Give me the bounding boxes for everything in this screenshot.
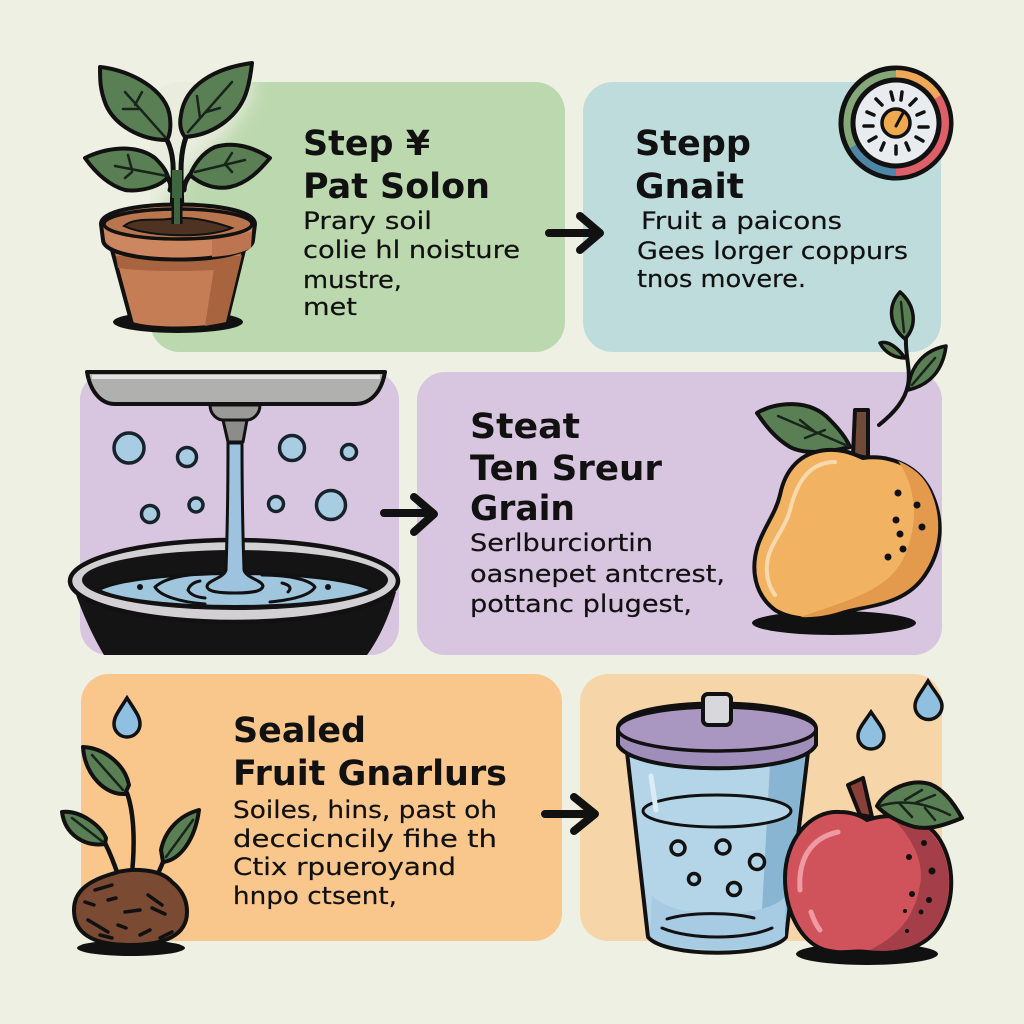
text: step three body: oasnepet antcrest, [470,560,725,588]
icon: sealed cup of water [618,694,816,953]
arrow: step one to two [549,216,600,250]
sprout leaf left [62,812,106,844]
leaf: lower left [85,149,168,190]
text: step four body: hnpo ctsent, [233,882,397,910]
soil mound [74,870,187,945]
sprout leaf right [161,810,199,862]
mango body [754,450,940,618]
icon: sprouting soil [62,747,199,956]
leaf: upper left [100,67,170,140]
icon: leafy sprig [879,292,946,425]
pot rim [101,204,255,260]
heading: step three [470,407,663,529]
text: step one body: Prary soil [303,207,432,235]
icon: potted plant [85,63,270,333]
panel: light orange illustration [580,674,942,941]
basin bowl [75,592,396,655]
text: step four body: Soiles, hins, past oh [233,796,497,824]
heading: step four [233,711,507,794]
icon: faucet and basin [70,372,398,655]
icon: dial gauge [841,68,951,178]
mango stem [853,410,868,458]
panel: purple fruit step [417,372,942,655]
heading: step three: Steat [470,407,580,447]
water stream [207,443,263,593]
cup lid [618,704,816,768]
icon: water drop [114,698,140,737]
apple stem [848,778,872,817]
text: step two body: Gees lorger coppurs [637,237,908,265]
heading: step two: Gnait [635,167,744,207]
icon: water drop middle [858,712,884,749]
icon: mango [752,404,940,635]
arrow: step four to cup [545,797,595,831]
text: step one body [303,207,520,321]
text: step two body [637,207,908,293]
heading: step two [635,124,751,207]
text: step three body: pottanc plugest, [470,590,692,618]
icon: red apple [785,778,962,965]
arrow: water to fruit [384,497,434,532]
heading: step four: Sealed [233,711,366,751]
panel: green step [150,82,565,352]
text: step three body: Serlburciortin [470,529,653,557]
leaf: lower right [190,145,270,188]
heading: step one: Pat Solon [303,167,490,207]
heading: step three: Ten Sreur [470,449,663,489]
mango leaf [757,404,850,452]
text: step two body: tnos movere. [637,265,806,293]
text: step four body [233,796,497,910]
text: step four body: deccicncily ﬁhe th [233,825,497,853]
lid knob [703,694,731,725]
text: step one body: colie hl noisture [303,236,520,264]
heading: step two: Stepp [635,124,751,164]
apple leaf [877,782,962,828]
text: step three body [470,529,725,618]
panel: purple water [80,372,399,655]
text: step two body: Fruit a paicons [641,207,842,235]
faucet bar [87,372,385,404]
text: step four body: Ctix rpueroyand [233,853,456,881]
sprout leaf top [83,747,129,794]
apple body [785,812,951,953]
heading: step one [303,124,490,207]
panel: orange step [81,674,562,941]
text: step one body: met [303,293,357,321]
text: step one body: mustre, [303,266,402,294]
leaf: upper right [180,63,252,137]
heading: step one: Step ¥ [303,124,430,164]
icon: water drop right [915,681,942,720]
panel: blue step [583,82,941,352]
heading: step three: Grain [470,489,575,529]
cup body [627,752,808,953]
heading: step four: Fruit Gnarlurs [233,754,507,794]
pot body [112,250,244,328]
